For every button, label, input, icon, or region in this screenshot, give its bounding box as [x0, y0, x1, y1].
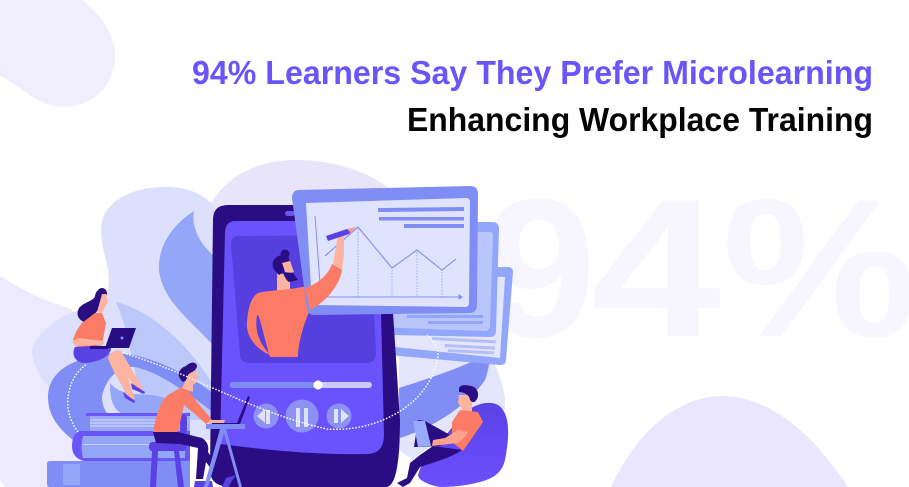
chair back: [180, 415, 187, 433]
lavender backdrop blob centre: [210, 160, 405, 330]
middle book: [72, 431, 190, 461]
woman legs: [108, 350, 144, 399]
woman skirt: [73, 346, 111, 363]
illustration backdrop: [0, 160, 505, 487]
man legs: [153, 432, 227, 484]
media controls: [254, 400, 352, 432]
man shirt: [452, 410, 483, 451]
arc behind woman: [48, 353, 213, 440]
stool: [149, 442, 186, 487]
phone: [210, 205, 400, 487]
woman shoes: [123, 383, 145, 403]
man arm: [432, 430, 468, 446]
dotted path: [68, 335, 438, 432]
board: back sheet: [372, 267, 513, 365]
title: [192, 54, 873, 138]
woman top: [73, 313, 106, 347]
watermark: 94%: [484, 158, 909, 378]
board text lines: [378, 207, 464, 212]
man upper leg: [414, 420, 452, 447]
pale blue blob: [32, 187, 215, 440]
presenter sleeve: [305, 264, 342, 310]
stacked papers: [338, 222, 513, 365]
video panel: [231, 235, 376, 363]
woman hair: [78, 289, 106, 322]
man hair: [459, 385, 478, 402]
watermark: 94%: 4: [591, 158, 721, 378]
progress bar: [230, 380, 372, 390]
line chart: [315, 216, 462, 299]
board surface: [306, 198, 470, 307]
presenter torso: [247, 264, 342, 357]
heading: purple line: 94% Learners Say They Prefer Microlearning: [192, 54, 873, 91]
beanbag: [418, 403, 508, 487]
arc right of phone: [399, 352, 490, 438]
man hair: [179, 363, 197, 382]
presenter beard: [283, 272, 298, 282]
presenter face: [282, 261, 294, 274]
watermark: 94%: 9: [484, 158, 596, 378]
leaf behind phone: [159, 211, 213, 345]
white gap by feet: [190, 460, 214, 487]
woman laptop: [90, 328, 136, 349]
pen: [326, 228, 354, 241]
presenter arm and hand: [333, 235, 344, 270]
pale shape right of phone: [399, 352, 505, 460]
small leaf above books: [110, 383, 178, 414]
main whiteboard: [292, 186, 478, 315]
lavender backdrop left: [0, 276, 90, 487]
presenter: [247, 250, 342, 357]
desk: [204, 424, 245, 487]
man laptop: [212, 396, 250, 424]
phone speaker: [285, 211, 295, 216]
forward button: [326, 404, 352, 428]
woman face: [97, 294, 108, 313]
phone body: [210, 205, 400, 487]
man head: [458, 395, 472, 412]
rewind button: [254, 404, 278, 428]
board: middle sheet: [338, 222, 499, 337]
board frame: [292, 186, 478, 315]
man head: [182, 370, 198, 392]
books: [47, 413, 190, 487]
presenter neck: [277, 273, 290, 292]
top book: [86, 413, 190, 416]
bottom book: [47, 461, 190, 487]
person: man on beanbag: [397, 385, 508, 487]
man hand: [209, 420, 225, 424]
man laptop: [413, 421, 431, 447]
person: woman with laptop: [72, 288, 145, 403]
woman arm: [72, 338, 104, 346]
leaf left of phone: [116, 302, 213, 420]
man shoes: [194, 475, 236, 487]
presenter hair: [280, 250, 290, 258]
pause button: [286, 400, 318, 432]
watermark: 94%: %: [722, 158, 909, 378]
man lower leg: [397, 446, 462, 487]
heading: black line: Enhancing Workplace Training: [407, 101, 873, 138]
man torso: [153, 387, 212, 432]
person: man at desk: [149, 363, 250, 487]
background blob: bottom right: [611, 396, 848, 487]
phone screen: [220, 221, 384, 454]
background blob: top left: [0, 0, 115, 107]
